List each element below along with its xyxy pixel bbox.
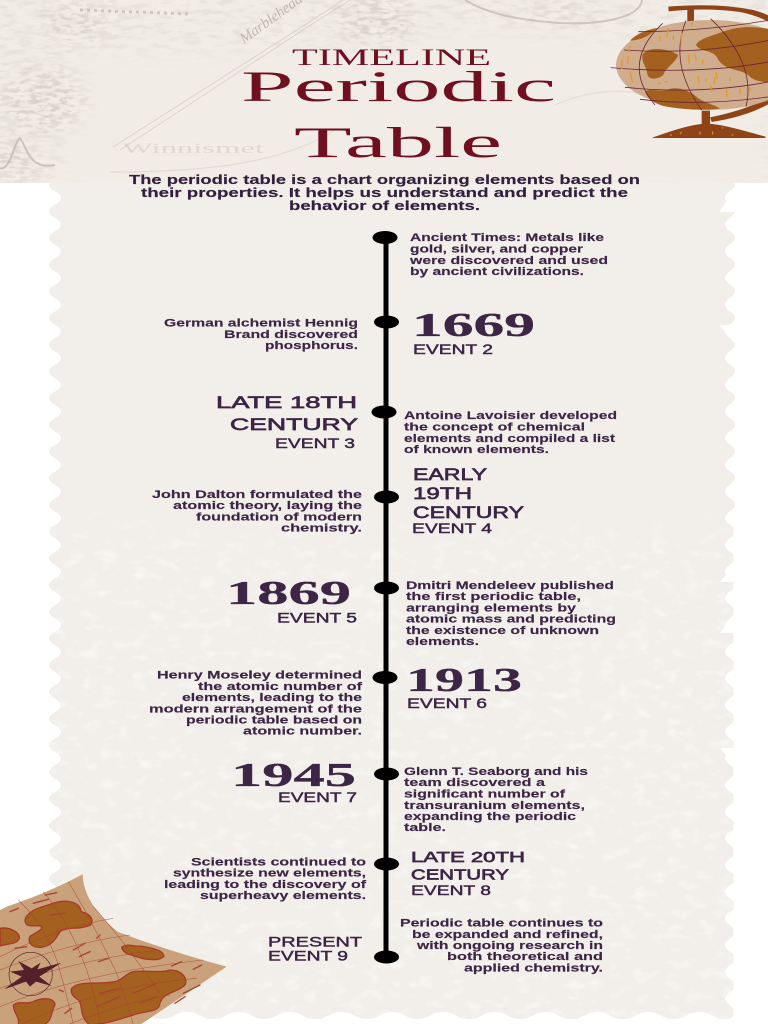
event 4 date: EARLY [413, 465, 487, 484]
event 3 date: CENTURY [230, 415, 358, 434]
event 6 description: periodic table based on [186, 714, 362, 726]
event 2 description: German alchemist Hennig [164, 318, 358, 330]
event 8 date: LATE 20TH [411, 849, 525, 866]
title: TIMELINE [292, 45, 491, 70]
event 8 description: leading to the discovery of [164, 879, 366, 891]
event 2 date [412, 307, 535, 357]
event 6 date: 1913 [406, 662, 522, 699]
event 8 description: synthesize new elements, [173, 868, 366, 880]
event 7 date: EVENT 7 [278, 789, 357, 805]
event 9 description: both theoretical and [447, 951, 603, 963]
event 6 description [149, 670, 362, 738]
event 8 date: CENTURY [411, 866, 509, 884]
event 9 description: applied chemistry. [464, 962, 603, 974]
header: vintage map background [0, 0, 768, 183]
event 5 description: atomic mass and predicting [406, 614, 616, 626]
event 3 description: Antoine Lavoisier developed [404, 410, 617, 422]
event 6 date: EVENT 6 [407, 695, 487, 711]
event 4 date: EVENT 4 [412, 520, 492, 536]
title: Table [294, 120, 502, 167]
event 2 date: EVENT 2 [413, 341, 493, 357]
event 4 date [412, 465, 524, 536]
event 7 description [404, 766, 588, 834]
event 7 description: team discovered a [404, 777, 546, 789]
event 4 description: atomic theory, laying the [173, 500, 362, 512]
event 6 description: atomic number. [243, 726, 362, 738]
event 3 description: of known elements. [404, 444, 549, 456]
event 3 date: LATE 18TH [216, 393, 357, 412]
event 5 date [226, 575, 357, 626]
header: vintage map background: Winnismet [122, 141, 266, 157]
event 2 date: 1669 [412, 307, 535, 344]
event 6 description: the atomic number of [198, 681, 362, 693]
icon: treasure map [0, 874, 227, 1024]
intro text: behavior of elements. [289, 199, 480, 213]
event 1 description: Ancient Times: Metals like [410, 232, 604, 244]
timeline axis with nodes [372, 231, 399, 964]
icon: globe [611, 5, 768, 138]
event 3 description: the concept of chemical [404, 422, 585, 434]
event 4 date: 19TH [413, 484, 472, 503]
event 4 date: CENTURY [413, 503, 524, 522]
event 5 description: the first periodic table, [406, 591, 581, 603]
event 9 description: with ongoing research in [416, 940, 603, 952]
event 6 description: Henry Moseley determined [157, 670, 362, 682]
event 9 description: be expanded and refined, [412, 929, 603, 941]
event 5 description: arranging elements by [406, 602, 577, 614]
event 5 date: EVENT 5 [277, 610, 357, 626]
event 5 description: the existence of unknown [406, 625, 599, 637]
event 3 description [404, 410, 617, 456]
event 4 description: John Dalton formulated the [152, 489, 362, 501]
event 9 date: EVENT 9 [268, 948, 348, 964]
title: Periodic [241, 64, 556, 111]
event 9 date: PRESENT [268, 934, 363, 950]
event 7 description: table. [404, 822, 446, 834]
event 7 date [231, 757, 357, 805]
event 7 description: Glenn T. Seaborg and his [404, 766, 588, 778]
event 5 description: elements. [406, 636, 479, 648]
event 4 description [152, 489, 362, 534]
event 9 date [268, 934, 363, 964]
intro text: their properties. It helps us understand and predict the [141, 186, 628, 200]
event 5 description: Dmitri Mendeleev published [406, 580, 614, 592]
event 2 description: phosphorus. [265, 340, 358, 352]
intro text: The periodic table is a chart organizing elements based on [129, 173, 640, 187]
event 6 description: elements, leading to the [182, 692, 362, 704]
event 9 description: Periodic table continues to [400, 918, 603, 930]
event 6 description: modern arrangement of the [149, 704, 362, 716]
event 8 date [411, 849, 525, 898]
intro text [129, 173, 640, 213]
event 5 description [406, 580, 616, 648]
event 7 description: significant number of [404, 788, 565, 800]
event 8 description [164, 856, 366, 902]
event 2 description [164, 318, 358, 352]
event 2 description: Brand discovered [224, 329, 358, 341]
event 7 date: 1945 [231, 757, 356, 794]
event 7 description: transuranium elements, [404, 800, 585, 812]
title [241, 45, 556, 167]
event 1 description: were discovered and used [409, 255, 608, 267]
event 4 description: foundation of modern [196, 512, 362, 524]
event 1 description: by ancient civilizations. [410, 266, 584, 278]
event 1 description [409, 232, 608, 278]
event 5 date: 1869 [226, 575, 351, 612]
panel: scalloped paper background [40, 165, 768, 1024]
event 4 description: chemistry. [281, 522, 362, 534]
event 3 date: EVENT 3 [275, 435, 355, 451]
event 3 description: elements and compiled a list [404, 433, 615, 445]
event 3 date [216, 393, 358, 451]
event 7 description: expanding the periodic [404, 811, 576, 823]
event 6 date [406, 662, 522, 711]
event 8 description: Scientists continued to [191, 856, 366, 868]
event 8 date: EVENT 8 [411, 882, 491, 898]
event 8 description: superheavy elements. [200, 890, 366, 902]
event 9 description [400, 918, 603, 974]
event 1 description: gold, silver, and copper [410, 244, 584, 256]
